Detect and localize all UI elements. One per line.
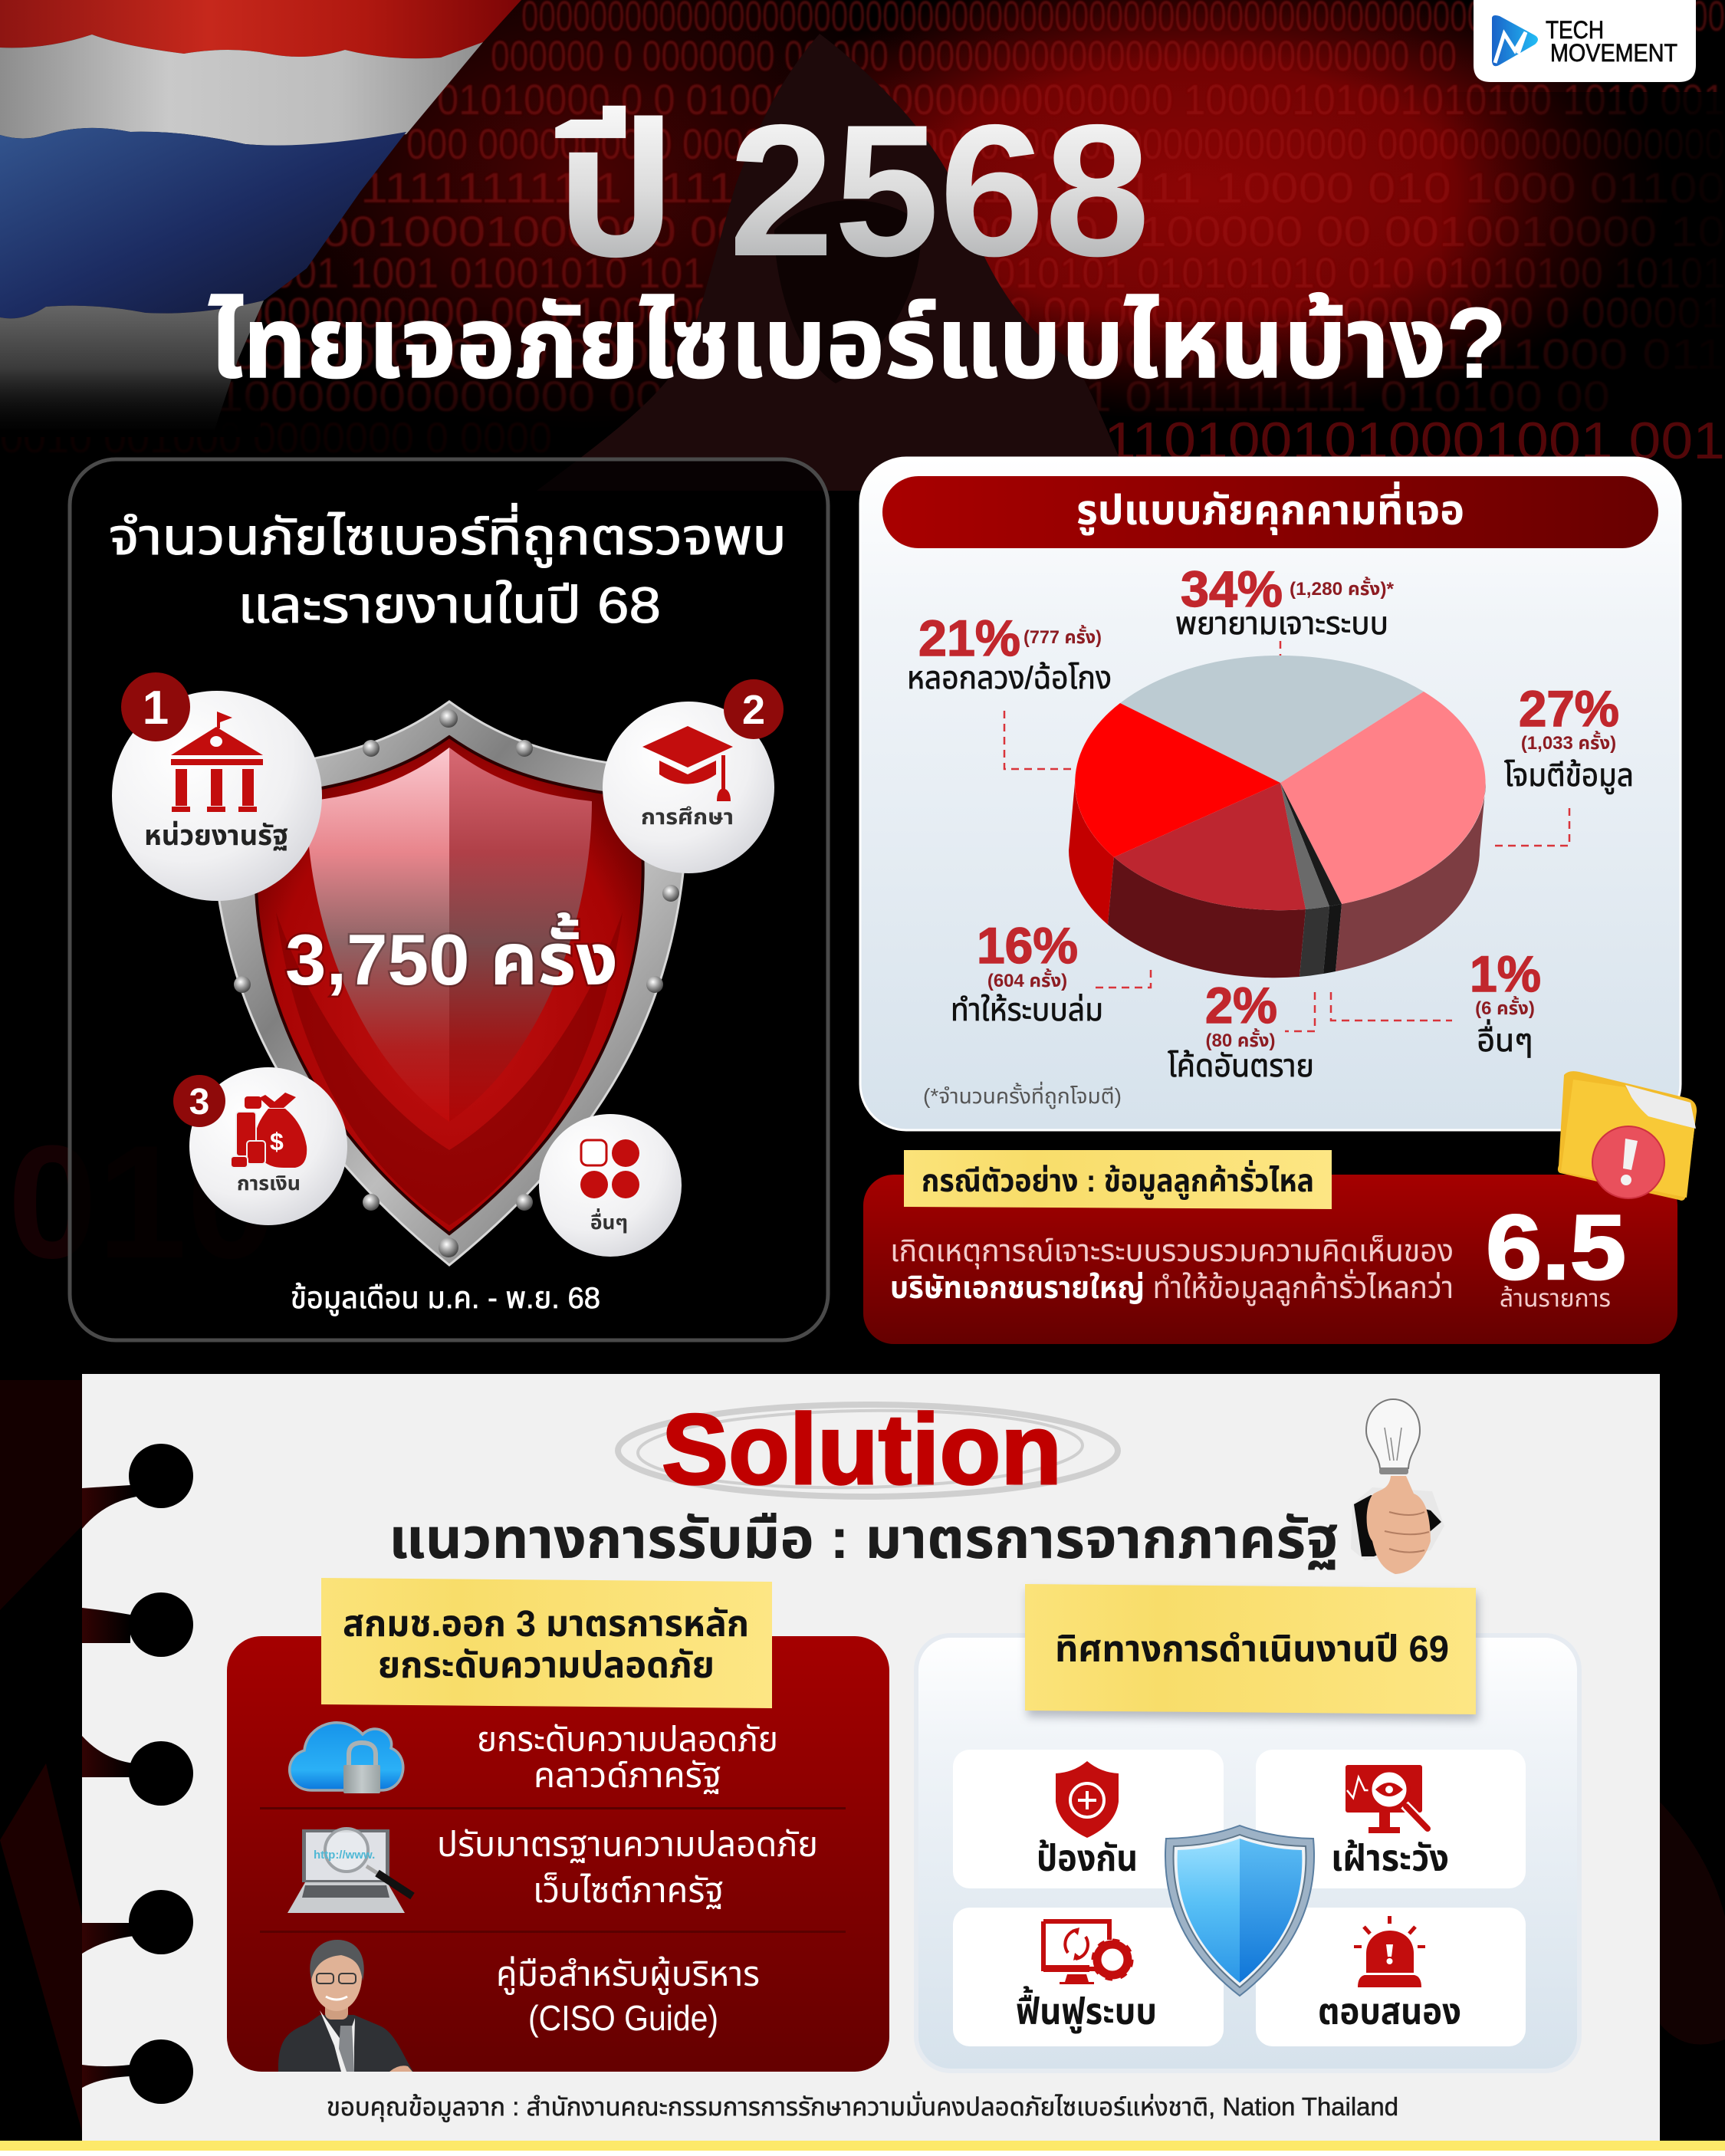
label 16%: (604 ครั้ง) — [987, 968, 1067, 991]
faint oversized digits: 010 — [8, 1112, 276, 1292]
figure 6.5: 6.5 — [1486, 1196, 1626, 1299]
description — [890, 1234, 1454, 1306]
background: dark red binary code: 000000 0 0000000 00 000 000000000000000000000000000 00 — [491, 31, 1457, 80]
circle: education — [603, 702, 774, 873]
icon: laptop with magnifier — [288, 1829, 412, 1913]
background: dark red binary code: 00001000000000000000 00 01000000 0000 00 11110 00 0000000000000 00 00 0 000001 — [0, 288, 1725, 337]
label 34%: 34% — [1181, 560, 1283, 617]
background: dark red binary code: 1000000010000000000000 0000000000 01111 101 0111111111 010100 00 — [0, 372, 1610, 420]
logo: Tech Movement: MOVEMENT — [1550, 39, 1677, 67]
note: direction title: ทิศทางการดำเนินงานปี 69 — [1055, 1629, 1449, 1670]
label 27% — [1504, 680, 1634, 794]
label 21% — [907, 610, 1112, 695]
badge 3: 3 — [189, 1082, 209, 1122]
label 34%: พยายามเจาะระบบ — [1175, 606, 1388, 641]
label 21%: (777 ครั้ง) — [1024, 625, 1102, 648]
label 27%: โจมตีข้อมูล — [1504, 758, 1634, 794]
circle: government: หน่วยงานรัฐ — [144, 820, 288, 851]
measure 2 text: เว็บไซต์ภาครัฐ — [533, 1870, 724, 1910]
label 16%: 16% — [977, 917, 1078, 974]
circle: others — [539, 1114, 682, 1257]
circle: finance: $ — [270, 1128, 284, 1155]
badge 2: 2 — [742, 687, 765, 733]
card: monitor: เฝ้าระวัง — [1331, 1839, 1449, 1879]
circle: government — [112, 691, 322, 901]
header pill — [882, 476, 1658, 548]
badge 2 — [724, 679, 784, 739]
footnote: (*จำนวนครั้งที่ถูกโจมตี) — [923, 1081, 1122, 1109]
badge 3 — [173, 1075, 225, 1127]
badge 1 — [121, 672, 190, 741]
logo: Tech Movement — [1474, 0, 1696, 82]
background: dark red binary code: 111111111 1 11110 0 11 1111111111111 10000 010 1000 01100 — [360, 163, 1725, 212]
measure 1 text: ยกระดับความปลอดภัย — [477, 1719, 778, 1759]
label 1%: (6 ครั้ง) — [1475, 996, 1535, 1019]
header pill: รูปแบบภัยคุกคามที่เจอ — [1076, 481, 1464, 535]
logo: Tech Movement: TECH — [1546, 16, 1604, 44]
card: prevent: ป้องกัน — [1037, 1839, 1138, 1879]
note: direction title — [1025, 1584, 1476, 1714]
icon: graduation cap — [642, 726, 733, 801]
label 2% — [1168, 977, 1314, 1083]
measure 1 text: คลาวด์ภาครัฐ — [534, 1755, 721, 1795]
card: monitor — [1256, 1750, 1526, 1888]
card: recover — [953, 1908, 1224, 2046]
icon: cloud lock — [290, 1723, 403, 1793]
faint oversized digits: 1 — [1610, 649, 1683, 795]
icon: money bag and coins — [231, 1093, 307, 1168]
note: measures title: สกมช.ออก 3 มาตรการหลัก — [343, 1604, 749, 1645]
note: measures title: ยกระดับความปลอดภัย — [378, 1645, 715, 1686]
panel: example case — [863, 1071, 1697, 1344]
label 34% — [1175, 560, 1395, 641]
circle: finance — [189, 1067, 347, 1225]
icon: executive portrait — [278, 1940, 413, 2072]
label 21%: หลอกลวง/ฉ้อโกง — [907, 660, 1112, 695]
label 16%: ทำให้ระบบล่ม — [951, 992, 1103, 1027]
background: dark red binary code: 0000 0 0000000 0000 0 00000 0000 0000 0 0 000 0000 00 0 11111000 011 — [0, 330, 1725, 378]
background: dark red binary code: 0010001000000 00 00000 0100000 0100000 00 0010010000 10 — [322, 207, 1725, 255]
3D pie chart — [1069, 656, 1486, 978]
icon: hand holding light bulb — [1351, 1399, 1444, 1574]
Thai flag — [0, 0, 521, 437]
panel: three measures — [227, 1578, 889, 2072]
panel heading: และรายงานในปี 68 — [238, 577, 661, 633]
panel: detected threats count — [70, 459, 828, 1340]
figure 6.5: ล้านรายการ — [1500, 1284, 1611, 1312]
leader lines — [1004, 641, 1569, 1031]
note: measures title — [321, 1578, 772, 1708]
card: respond — [1256, 1908, 1526, 2046]
label 27%: (1,033 ครั้ง) — [1521, 731, 1616, 754]
label 2%: (80 ครั้ง) — [1205, 1028, 1276, 1051]
label 2%: โค้ดอันตราย — [1168, 1048, 1314, 1083]
faint oversized digits: 10 — [1472, 879, 1617, 1025]
label 2%: 2% — [1205, 977, 1277, 1034]
icon: logo mark — [1492, 15, 1538, 66]
label 1% — [1470, 945, 1541, 1058]
description: เกิดเหตุการณ์เจาะระบบรวบรวมความคิดเห็นของ — [890, 1234, 1454, 1269]
label 1%: อื่นๆ — [1477, 1019, 1533, 1058]
icon: government building — [171, 712, 263, 812]
subheading: แนวทางการรับมือ : มาตรการจากภาครัฐ — [389, 1507, 1339, 1570]
icon: monitor with gear — [1043, 1921, 1132, 1984]
total count: 3,750 ครั้ง — [285, 912, 618, 1000]
shield — [212, 702, 687, 1265]
icon: red shield plus — [1056, 1761, 1119, 1838]
credit line: ขอบคุณข้อมูลจาก : สำนักงานคณะกรรมการการรักษาความมั่นคงปลอดภัยไซเบอร์แห่งชาติ, Nation Thailand — [327, 2091, 1398, 2122]
icon: monitor with eye magnifier — [1346, 1765, 1428, 1833]
description: บริษัทเอกชนรายใหญ่ ทำให้ข้อมูลลูกค้ารั่วไหลกว่า — [890, 1268, 1454, 1306]
icon: blue shield — [1165, 1826, 1314, 1996]
subtitle: ไทยเจอภัยไซเบอร์แบบไหนบ้าง? — [209, 287, 1506, 399]
panel heading: จำนวนภัยไซเบอร์ที่ถูกตรวจพบ — [109, 503, 787, 568]
measure 3 text: คู่มือสำหรับผู้บริหาร — [496, 1954, 760, 1995]
label 16% — [951, 917, 1103, 1027]
background: dark red binary code: 1101001010001001 001 — [1104, 412, 1725, 470]
binder holes and necks — [82, 1444, 193, 2104]
circle: education: การศึกษา — [641, 805, 734, 829]
measure 2 text — [437, 1824, 818, 1910]
icon: laptop with magnifier: http://www. — [314, 1849, 375, 1862]
panel heading — [109, 503, 787, 633]
panel: threat types pie — [860, 458, 1681, 1130]
badge 1: 1 — [143, 682, 169, 735]
data period note: ข้อมูลเดือน ม.ค. - พ.ย. 68 — [291, 1282, 600, 1316]
card: recover: ฟื้นฟูระบบ — [1016, 1986, 1157, 2034]
circle: finance: การเงิน — [237, 1172, 301, 1195]
measure 2 text: ปรับมาตรฐานความปลอดภัย — [437, 1824, 818, 1864]
label 21%: 21% — [918, 610, 1020, 666]
hooded figure silhouette — [537, 34, 1135, 491]
panel: solution notebook page — [82, 1374, 1660, 2141]
circle: others: อื่นๆ — [590, 1208, 628, 1234]
icon: siren — [1354, 1916, 1425, 1987]
title: year: ปี 2568 — [555, 85, 1150, 295]
card: prevent — [953, 1750, 1224, 1888]
Solution heading: Solution — [662, 1393, 1062, 1505]
tag: example case: กรณีตัวอย่าง : ข้อมูลลูกค้ารั่วไหล — [922, 1159, 1314, 1200]
measure 3 text — [496, 1954, 760, 2038]
icon: folder alert — [1558, 1071, 1697, 1201]
icon: four shapes — [580, 1139, 639, 1198]
label 34%: (1,280 ครั้ง)* — [1290, 577, 1395, 600]
panel: 2569 direction — [916, 1584, 1579, 2071]
tag: example case — [904, 1150, 1332, 1209]
measure 1 text — [477, 1719, 778, 1795]
bottom yellow strip — [0, 2141, 1725, 2151]
label 27%: 27% — [1519, 680, 1619, 737]
measure 3 text: (CISO Guide) — [528, 1998, 718, 2038]
background: dark red binary code: 0010 001000 0000000 0 0000 — [0, 413, 552, 462]
faint oversized digits — [8, 649, 1683, 1292]
card: respond: ตอบสนอง — [1318, 1992, 1461, 2033]
label 1%: 1% — [1470, 945, 1541, 1002]
